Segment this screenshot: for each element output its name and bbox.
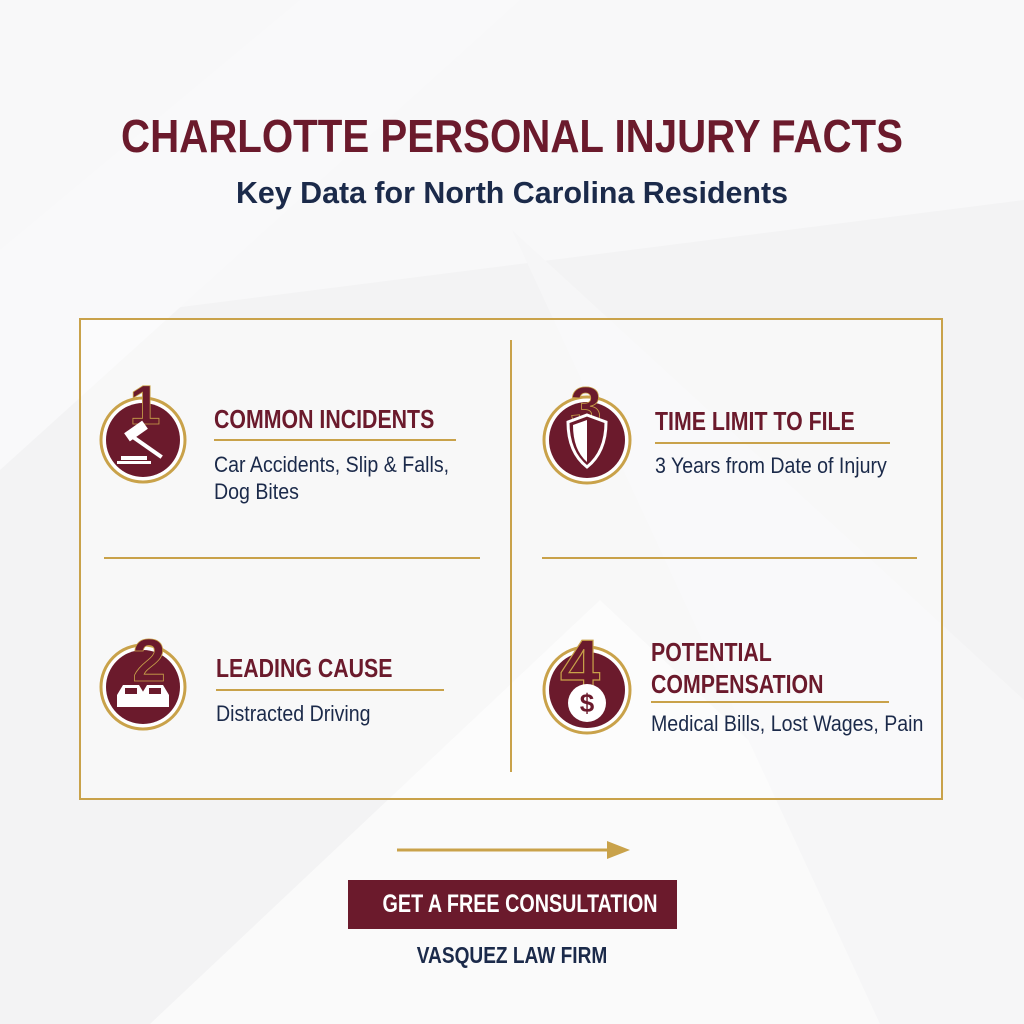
icon: dollar 4	[542, 626, 632, 734]
heading: potential compensation: POTENTIAL	[651, 637, 772, 667]
panel: facts box	[79, 318, 943, 800]
icon: gavel 1	[100, 373, 186, 484]
heading: potential compensation: COMPENSATION	[651, 669, 824, 699]
button: consultation	[348, 880, 677, 929]
icon: cars 2: 2	[132, 627, 166, 694]
footer: firm name: VASQUEZ LAW FIRM	[417, 942, 607, 968]
text: time limit: 3 Years from Date of Injury	[655, 453, 887, 478]
heading: leading cause: LEADING CAUSE	[216, 653, 393, 683]
button: consultation: GET A FREE CONSULTATION	[383, 890, 658, 918]
icon: cars 2	[100, 627, 186, 730]
heading: time limit: TIME LIMIT TO FILE	[655, 406, 855, 436]
icon: dollar 4: 4	[560, 626, 600, 706]
text: common incidents: Dog Bites	[214, 479, 299, 504]
icon: shield 3: 3	[570, 375, 602, 438]
heading: common incidents: COMMON INCIDENTS	[214, 404, 434, 434]
title: CHARLOTTE PERSONAL INJURY FACTS	[121, 110, 903, 162]
icon: dollar 4: $	[580, 688, 595, 718]
heading: potential compensation	[651, 637, 824, 699]
subtitle: Key Data for North Carolina Residents	[236, 175, 788, 210]
text: compensation: Medical Bills, Lost Wages, Pain	[651, 711, 923, 736]
icon: shield 3	[542, 375, 632, 484]
text: leading cause: Distracted Driving	[216, 701, 371, 726]
text: common incidents	[214, 452, 449, 504]
text: common incidents: Car Accidents, Slip & Falls,	[214, 452, 449, 477]
arrow	[397, 841, 630, 859]
icon: gavel 1: 1	[129, 373, 161, 436]
